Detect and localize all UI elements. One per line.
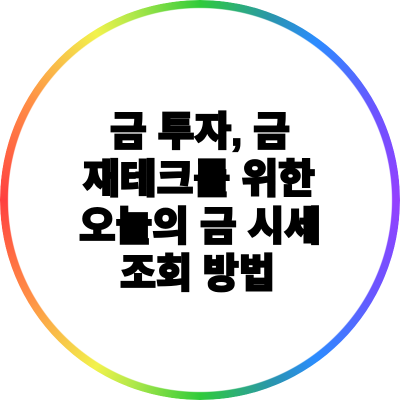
title line 3: 오늘의 금 시세: [79, 205, 321, 249]
title line 1: 금 투자, 금: [110, 110, 290, 154]
title line 2: 재테크를 위한: [83, 158, 315, 202]
title line 4: 조회 방법: [120, 252, 275, 296]
